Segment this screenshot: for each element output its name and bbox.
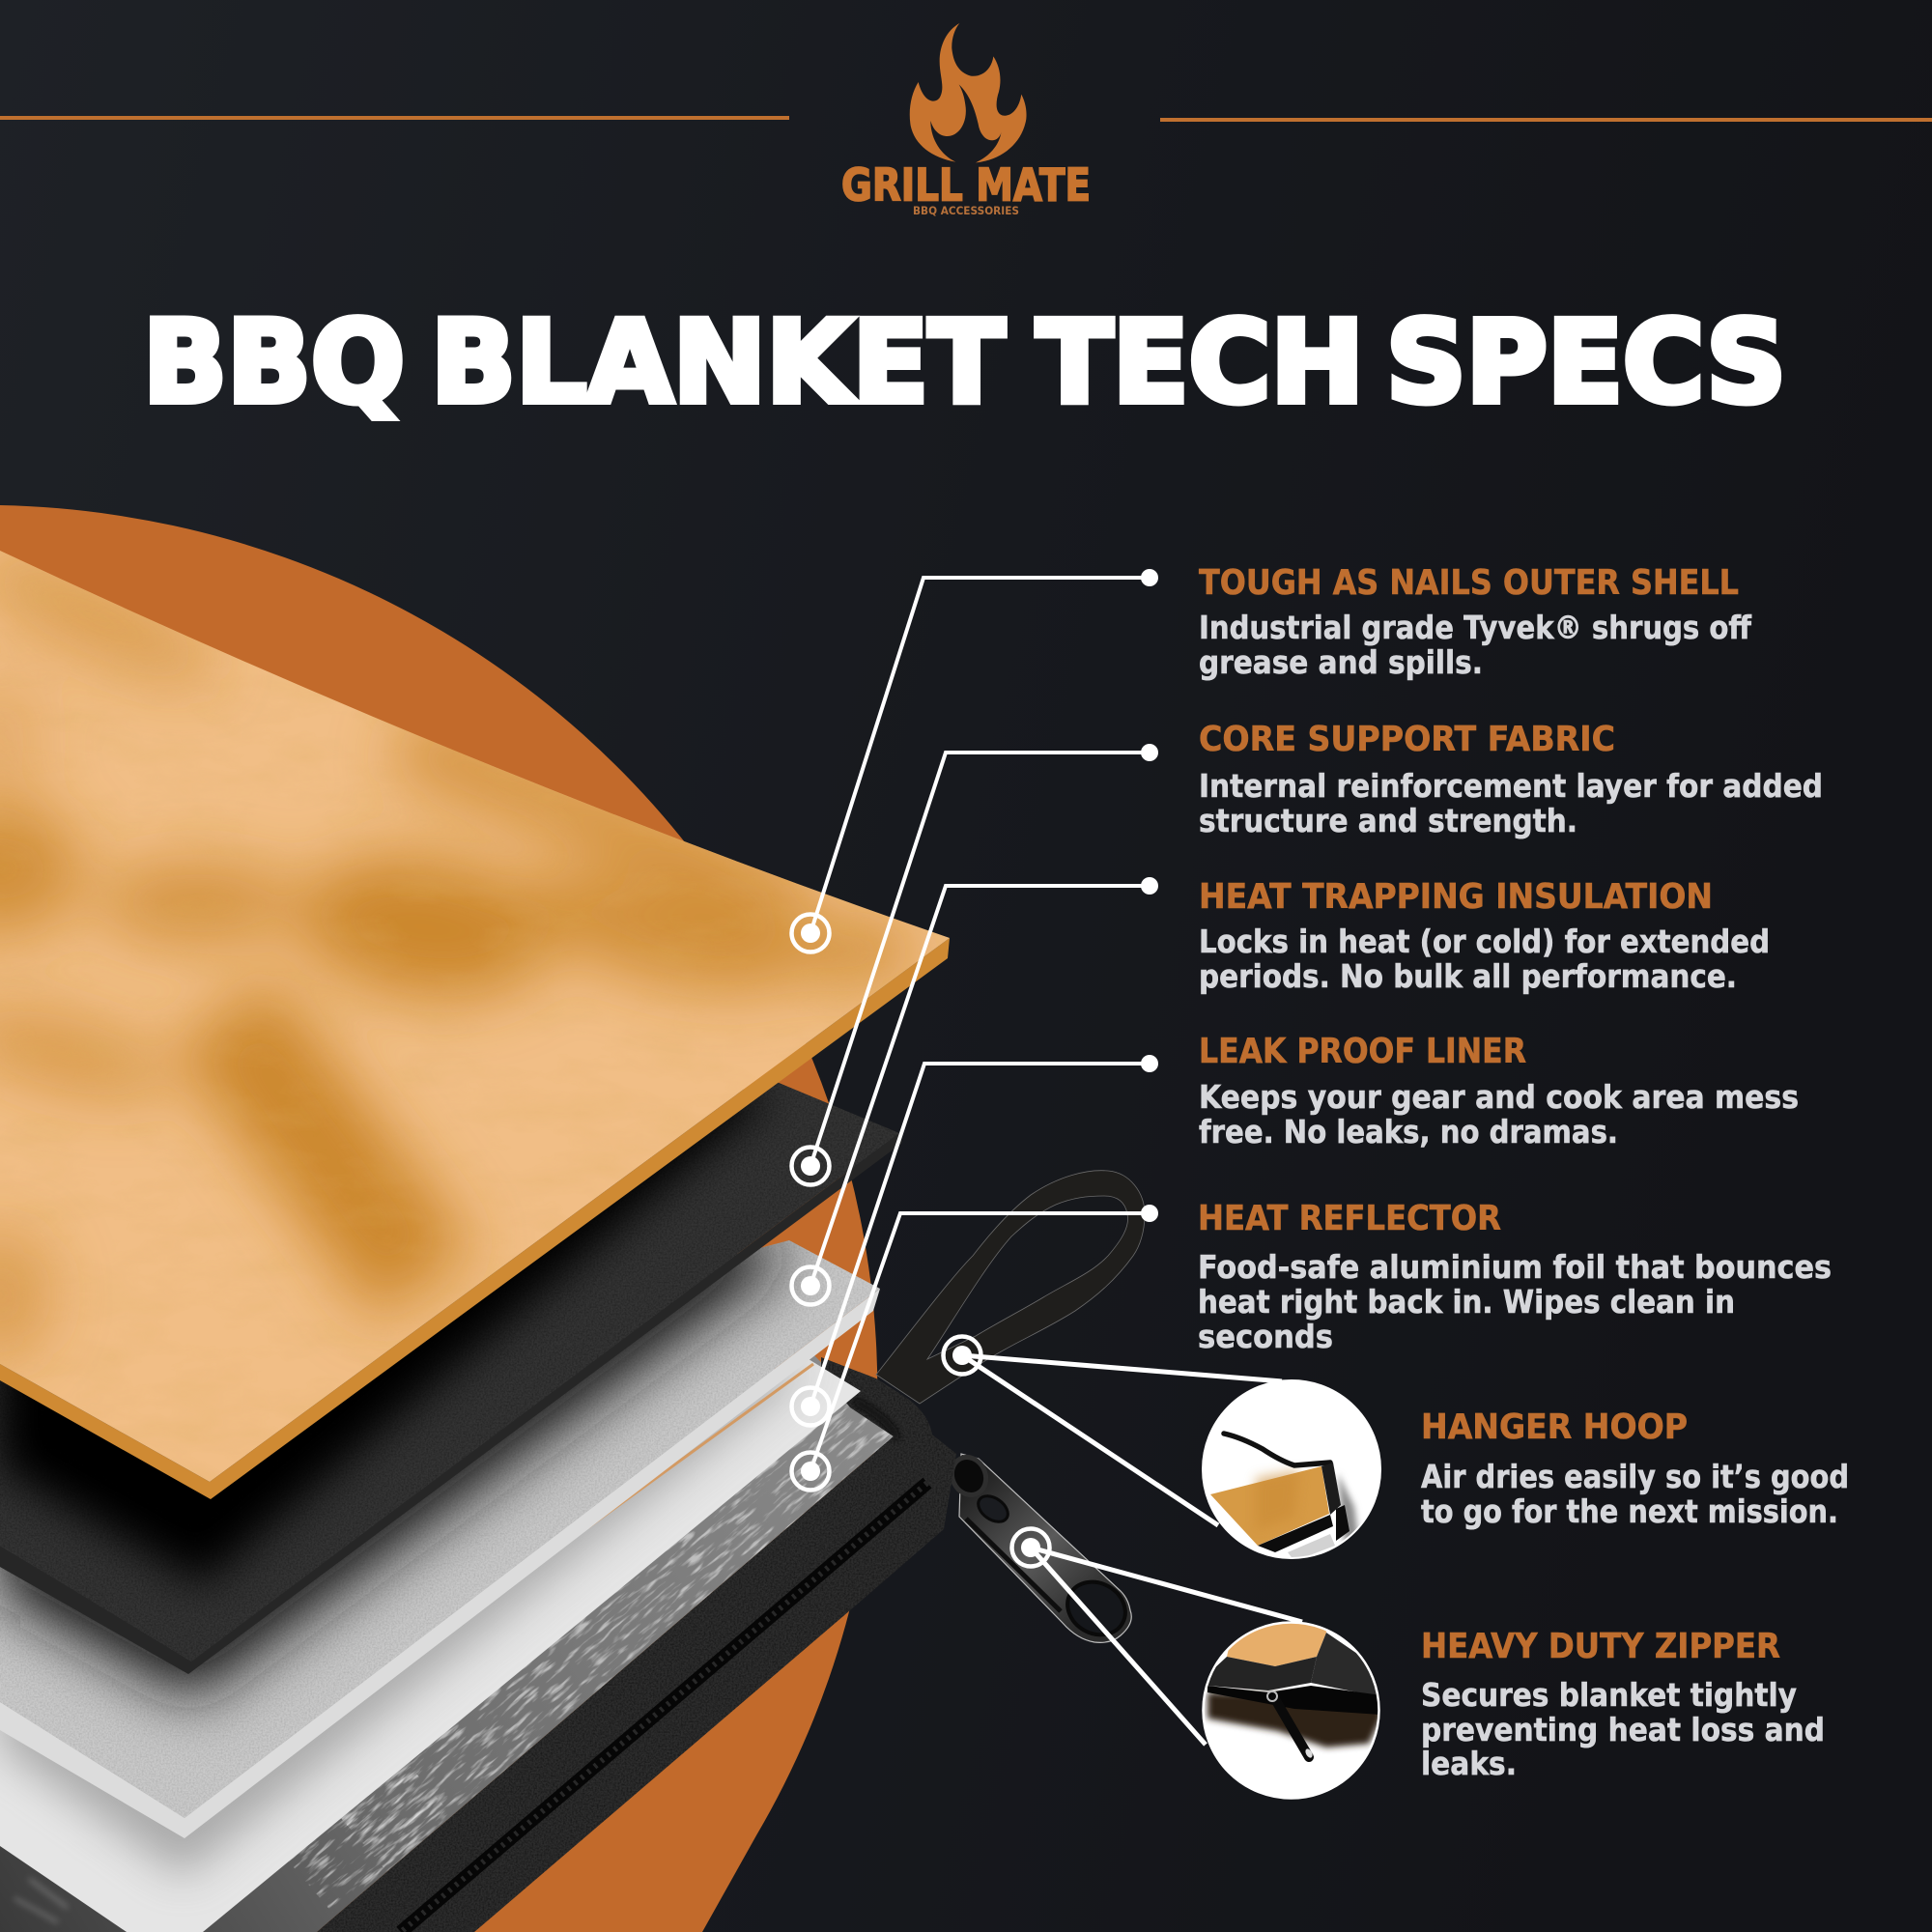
logo: Grill Mate [841, 23, 1091, 217]
leader: liner [810, 1064, 1150, 1406]
hanger loop strap [876, 1171, 1145, 1404]
spec: core support fabric: Internal reinforcement layer for added [1199, 767, 1823, 805]
icon: flame [910, 23, 1027, 162]
blanket layer: heat trapping insulation (grey) [0, 1227, 881, 1838]
inner roll shadow [855, 1401, 896, 1439]
zipper teeth [401, 1483, 927, 1932]
callout markers [792, 569, 1158, 1567]
spec: heat trapping insulation [1199, 877, 1770, 995]
leader: insulation [810, 886, 1150, 1286]
spec: core support fabric [1199, 720, 1823, 839]
spec: hanger hoop [1421, 1407, 1849, 1530]
title [143, 298, 1786, 429]
thumbnail ring: hanger hoop [1203, 1380, 1380, 1558]
leader: hanger hoop [962, 1355, 1282, 1525]
spec: heat trapping insulation: periods. No bulk all performance. [1199, 957, 1737, 995]
spec: core support fabric: structure and strength. [1199, 802, 1577, 839]
spec: heat reflector [1198, 1199, 1832, 1355]
blanket layer: leak proof liner (white) [0, 1352, 869, 1932]
spec: outer shell: Industrial grade Tyvek® shrugs off [1199, 609, 1752, 646]
zipper tape [401, 1483, 927, 1932]
spec: heavy duty zipper: HEAVY DUTY ZIPPER [1421, 1627, 1780, 1666]
spec: heavy duty zipper: leaks. [1421, 1745, 1517, 1782]
blanket layer: outer shell (Tyvek sheet) [0, 527, 956, 1499]
spec: leak proof liner: LEAK PROOF LINER [1199, 1032, 1526, 1071]
spec: hanger hoop: HANGER HOOP [1421, 1407, 1688, 1447]
spec: outer shell: TOUGH AS NAILS OUTER SHELL [1199, 563, 1739, 603]
spec text [1198, 563, 1849, 1782]
spec: core support fabric: CORE SUPPORT FABRIC [1199, 720, 1615, 759]
spec: heat reflector: heat right back in. Wipes clean in [1198, 1283, 1735, 1321]
spec: leak proof liner [1199, 1032, 1799, 1151]
title: TECH [1037, 298, 1364, 429]
spec: outer shell [1199, 563, 1752, 681]
title: BLANKET [431, 298, 1005, 429]
spec: outer shell: grease and spills. [1199, 643, 1483, 681]
title: BBQ [143, 298, 405, 429]
leader: outer shell [810, 578, 1150, 933]
orange backdrop circle [0, 505, 877, 1932]
leader: reflector [810, 1213, 1150, 1471]
leader: zipper [1031, 1548, 1302, 1745]
header rule left [0, 116, 789, 120]
spec: heavy duty zipper: preventing heat loss and [1421, 1711, 1825, 1748]
spec: hanger hoop: to go for the next mission. [1421, 1492, 1838, 1530]
sheet edge thickness [0, 938, 950, 1499]
spec: leak proof liner: Keeps your gear and cook area mess [1199, 1078, 1799, 1116]
blanket layer: core support fabric (black) [0, 1082, 903, 1674]
blanket layer: foil heat reflector [0, 1356, 894, 1932]
logo wordmark: GRILL MATE [841, 158, 1091, 211]
sheet mottling [0, 527, 956, 1488]
spec: heat trapping insulation: Locks in heat (or cold) for extended [1199, 923, 1770, 960]
spec: leak proof liner: free. No leaks, no dramas. [1199, 1113, 1618, 1151]
spec: heat reflector: seconds [1198, 1318, 1333, 1355]
header rule right [1160, 118, 1932, 122]
zipper pull [928, 1452, 1135, 1645]
leader: core fabric [810, 753, 1150, 1166]
spec: heat reflector: HEAT REFLECTOR [1198, 1199, 1501, 1238]
spec: hanger hoop: Air dries easily so it’s good [1421, 1458, 1849, 1495]
thumbnail: hanger hoop [1204, 1381, 1379, 1557]
logo tagline: BBQ ACCESSORIES [913, 204, 1019, 217]
spec: heavy duty zipper: Secures blanket tightly [1421, 1676, 1797, 1714]
callout leader lines [810, 578, 1302, 1745]
spec: heavy duty zipper [1421, 1627, 1825, 1782]
spec: heat trapping insulation: HEAT TRAPPING INSULATION [1199, 877, 1713, 917]
thumbnail ring: heavy duty zipper [1204, 1623, 1379, 1799]
spec: heat reflector: Food-safe aluminium foil that bounces [1198, 1248, 1832, 1286]
blanket layer: zipper border [309, 1352, 966, 1932]
title: SPECS [1386, 298, 1786, 429]
thumbnail: heavy duty zipper [1204, 1623, 1378, 1797]
